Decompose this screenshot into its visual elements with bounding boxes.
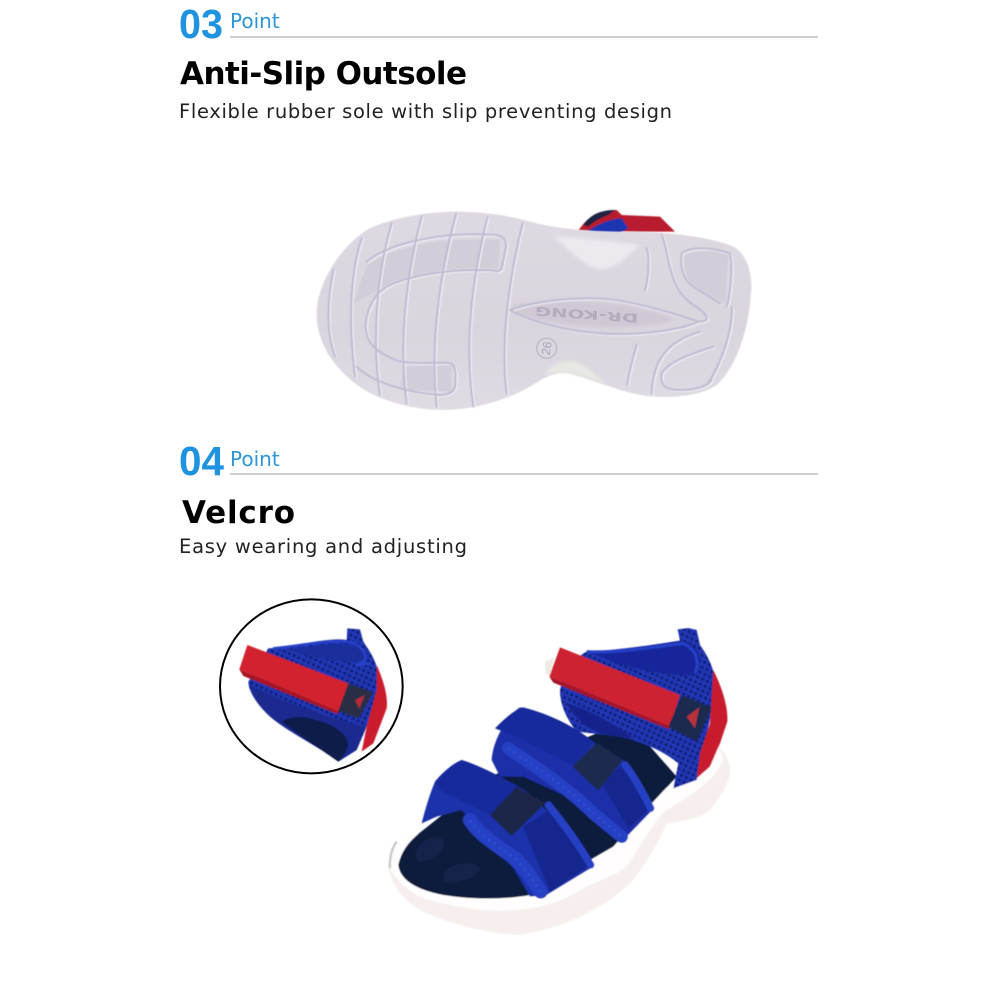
front forefoot strap [422, 760, 593, 897]
section 04 header [179, 438, 818, 484]
heading: Velcro: Velcro [182, 495, 295, 531]
red heel panel [697, 670, 727, 778]
rim shadow [390, 842, 397, 868]
navy tab [338, 683, 373, 718]
number 03: 03 [179, 1, 223, 47]
description: outsole: Flexible rubber sole with slip preventing design [179, 100, 672, 123]
straps peeking behind sole [578, 210, 675, 233]
number 04: 04 [179, 438, 224, 484]
size badge [537, 338, 557, 358]
size badge: 26 [539, 340, 555, 356]
insole [282, 717, 348, 762]
red strap [549, 647, 680, 727]
heel hollow and arch shading [513, 237, 677, 385]
dark footbed [398, 733, 677, 899]
white strap end [545, 658, 554, 677]
illustration: blue and red sandal [388, 628, 730, 935]
section 03 header [179, 1, 818, 47]
label Point: Point [230, 9, 280, 33]
tread patches [353, 239, 728, 392]
tread grooves [329, 214, 733, 408]
heading: Anti-Slip Outsole: Anti-Slip Outsole [180, 56, 467, 92]
description: velcro: Easy wearing and adjusting [179, 535, 467, 558]
sole top rim [388, 747, 723, 911]
red heel [362, 665, 387, 752]
label Point: Point [230, 447, 280, 471]
rear forefoot strap [492, 707, 654, 837]
toe prints [415, 837, 480, 883]
heel mesh [248, 628, 379, 762]
sole side wall [388, 747, 730, 935]
inset: heel strap detail [220, 599, 403, 773]
red strap [239, 645, 348, 712]
embossed brand: DR-KONG [535, 304, 639, 325]
strap tab [668, 695, 712, 742]
front velcro tab [490, 787, 545, 836]
heel mesh [560, 628, 715, 788]
rear velcro tab [573, 743, 623, 791]
sole body [317, 212, 751, 410]
illustration: sandal outsole [317, 210, 751, 410]
